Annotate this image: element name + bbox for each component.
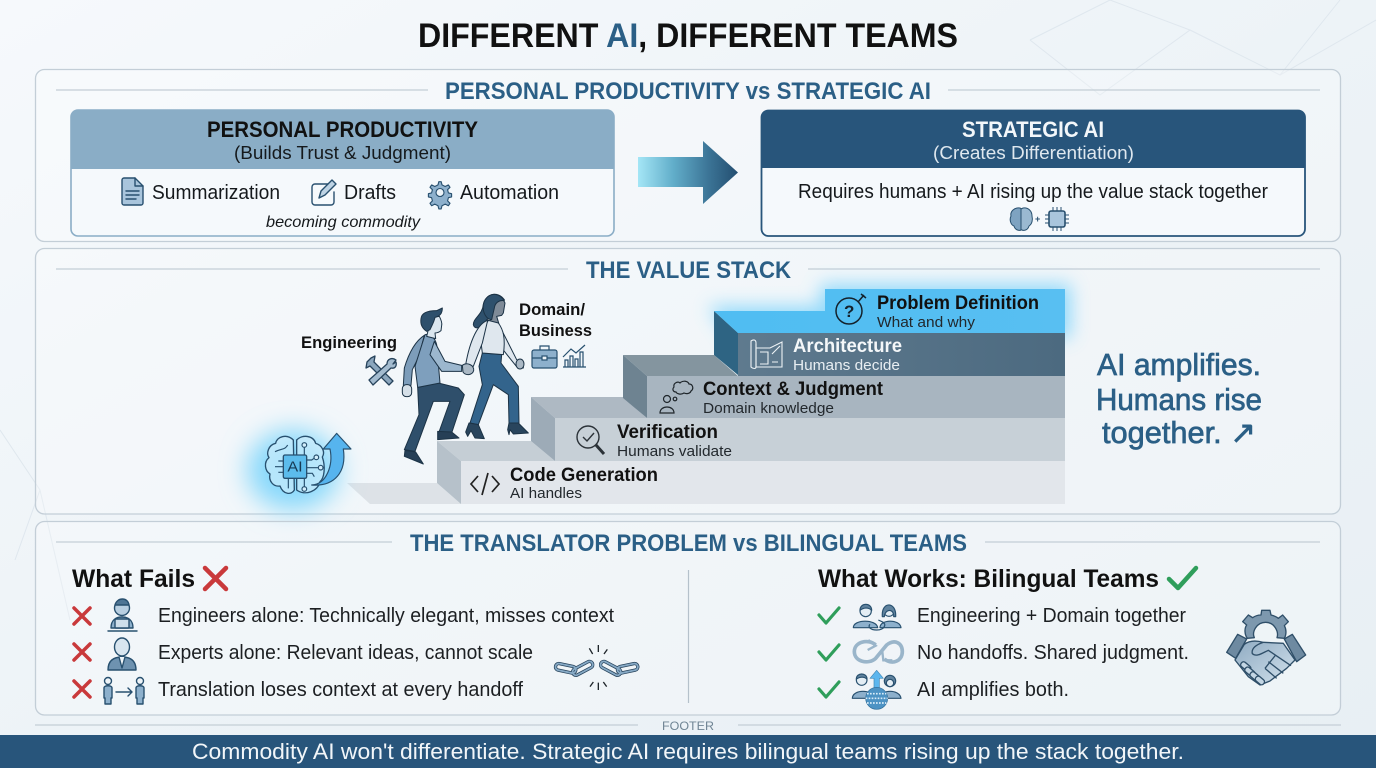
figure: man	[402, 308, 474, 464]
icon: AI brain with rising arrow: AI	[287, 460, 303, 476]
step: code generation: AI handles	[510, 485, 582, 502]
row: experts alone: Experts alone: Relevant ideas, cannot scale	[158, 642, 533, 664]
heading: the value stack: THE VALUE STACK	[586, 257, 792, 284]
step: code generation	[437, 441, 1065, 504]
card: personal productivity: Summarization	[152, 182, 280, 204]
step: architecture	[714, 311, 1065, 376]
callout: AI amplifies, humans rise together: AI amplifies.	[1097, 347, 1261, 382]
row: no handoffs	[819, 640, 1189, 664]
step: context and judgment: Context & Judgment	[703, 379, 884, 400]
icon: green check	[1169, 568, 1196, 588]
row: engineers alone: Engineers alone: Technically elegant, misses context	[158, 605, 614, 627]
row: engineering + domain	[819, 604, 1186, 630]
card: strategic AI: (Creates Differentiation)	[933, 143, 1134, 163]
row: translation loses context	[74, 678, 523, 704]
step: problem definition	[714, 289, 1065, 333]
figure: woman	[466, 294, 528, 439]
step: architecture: Humans decide	[793, 357, 900, 374]
card: strategic AI	[761, 110, 1305, 236]
icon: document	[122, 178, 143, 205]
icon: gear	[428, 182, 452, 209]
row: AI amplifies both	[819, 670, 1069, 709]
step: verification: Verification	[617, 422, 718, 443]
card: personal productivity: Automation	[460, 182, 559, 204]
card: personal productivity: Drafts	[344, 182, 396, 204]
step: problem definition: What and why	[877, 314, 976, 331]
card: personal productivity: becoming commodity	[266, 214, 421, 231]
step: architecture: Architecture	[793, 336, 902, 357]
row: engineering + domain: Engineering + Domain together	[917, 605, 1186, 627]
icon: brain plus chip	[1010, 207, 1069, 231]
figure: engineer and domain expert climbing	[402, 294, 528, 464]
card: strategic AI: Requires humans + AI rising up the value stack together	[798, 181, 1268, 203]
icon: pencil draft	[312, 180, 336, 205]
row: no handoffs: No handoffs. Shared judgment.	[917, 642, 1189, 664]
step: context and judgment	[623, 355, 1065, 418]
icon: blueprint	[751, 340, 782, 368]
column: what works: What Works: Bilingual Teams	[818, 565, 1159, 593]
step: verification	[531, 397, 1065, 461]
step: code generation: Code Generation	[510, 465, 658, 486]
row: AI amplifies both: AI amplifies both.	[917, 679, 1069, 701]
card: personal productivity: (Builds Trust & Judgment)	[234, 143, 451, 163]
column: what fails: What Fails	[72, 565, 195, 593]
row: translation loses context: Translation loses context at every handoff	[158, 679, 523, 701]
footer label: FOOTER	[662, 719, 714, 733]
icon: briefcase and chart	[532, 345, 586, 368]
row: engineers alone	[74, 599, 614, 631]
icon: AI brain with rising arrow	[265, 433, 351, 493]
label: engineering: Engineering	[301, 333, 397, 352]
icon: handshake with gear	[1227, 610, 1306, 686]
step: problem definition: Problem Definition	[877, 293, 1039, 314]
callout: AI amplifies, humans rise together	[1096, 347, 1262, 450]
title: DIFFERENT AI, DIFFERENT TEAMS	[418, 17, 958, 55]
icon: question target: ?	[844, 302, 854, 321]
row: experts alone	[74, 638, 533, 670]
icon: red cross	[205, 568, 226, 589]
footer banner	[0, 735, 1376, 768]
panel: the value stack	[36, 248, 1340, 514]
card: personal productivity	[71, 110, 614, 236]
heading: personal productivity vs strategic AI: PERSONAL PRODUCTIVITY vs STRATEGIC AI	[445, 78, 931, 105]
column: what fails	[72, 565, 638, 704]
label: engineering	[301, 333, 397, 385]
staircase	[347, 284, 1071, 504]
callout: AI amplifies, humans rise together: together. ↗	[1102, 415, 1256, 450]
icon: broken chain	[555, 645, 638, 690]
footer banner: Commodity AI won't differentiate. Strategic AI requires bilingual teams rising up the stack together.	[192, 739, 1184, 764]
card: personal productivity: PERSONAL PRODUCTIVITY	[207, 117, 478, 142]
step: verification: Humans validate	[617, 443, 732, 460]
icon: wrench and screwdriver	[366, 356, 396, 385]
AI glow path	[247, 430, 428, 510]
icon: brain plus chip: +	[1035, 214, 1040, 224]
panel: personal productivity vs strategic AI	[36, 70, 1340, 242]
arrow: personal to strategic	[638, 141, 738, 204]
icon: thought person	[660, 381, 693, 413]
step: context and judgment: Domain knowledge	[703, 400, 834, 417]
icon: question target	[836, 294, 866, 324]
icon: code brackets	[471, 473, 499, 495]
heading: translator problem vs bilingual teams: THE TRANSLATOR PROBLEM vs BILINGUAL TEAMS	[410, 530, 967, 557]
panel: translator problem vs bilingual teams	[36, 522, 1340, 715]
callout: AI amplifies, humans rise together: Humans rise	[1096, 382, 1262, 417]
label: domain business	[519, 300, 592, 368]
label: domain business: Domain/	[519, 300, 585, 319]
label: domain business: Business	[519, 321, 592, 340]
card: strategic AI: STRATEGIC AI	[962, 117, 1104, 142]
column: what works	[818, 565, 1306, 709]
icon: magnifier check	[577, 426, 604, 454]
